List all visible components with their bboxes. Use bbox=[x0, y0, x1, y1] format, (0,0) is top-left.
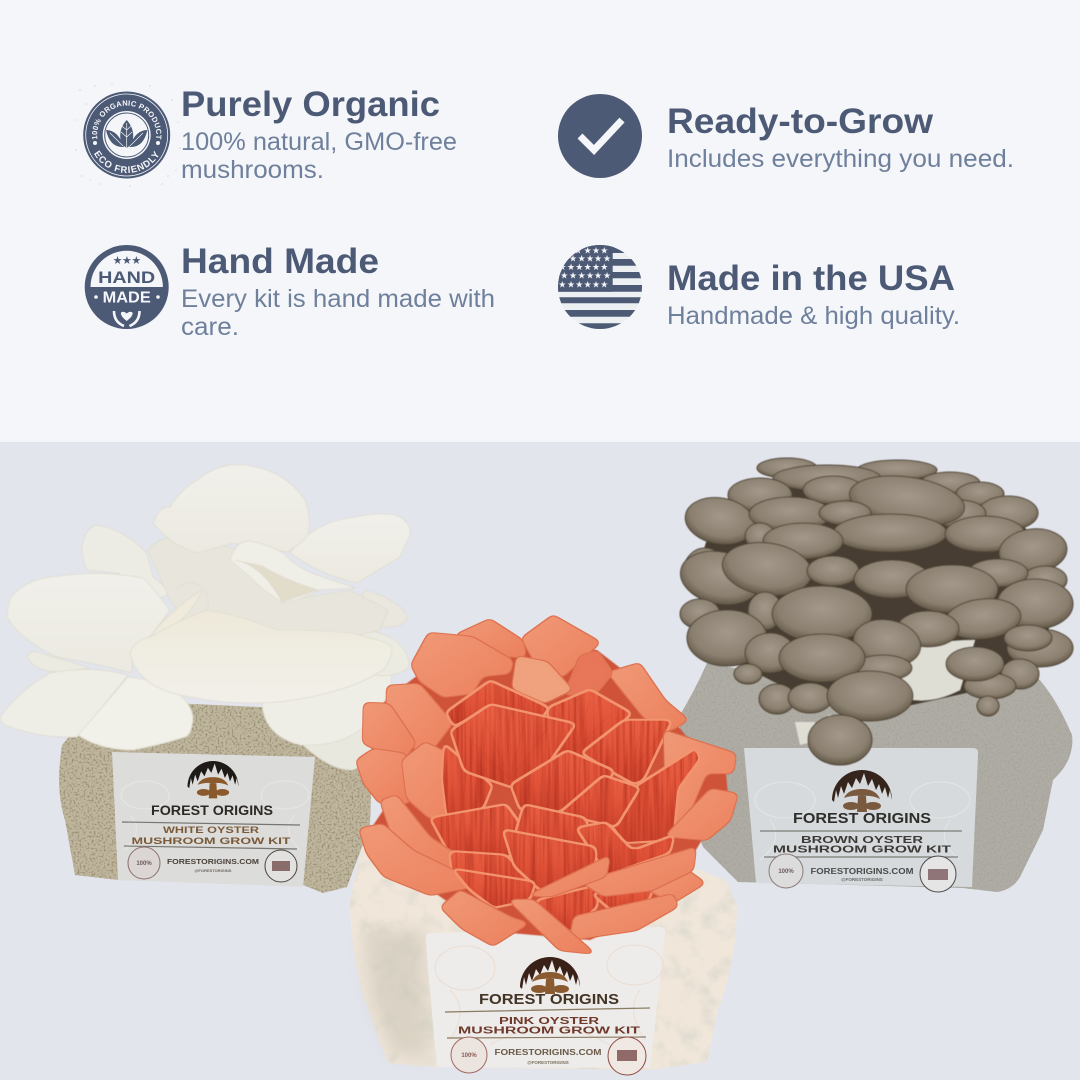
product label: white oyster: FOREST ORIGINS bbox=[151, 803, 273, 818]
icon: check mark bbox=[558, 94, 642, 178]
product label: brown oyster: 100% bbox=[778, 869, 794, 875]
description: purely organic: mushrooms. bbox=[181, 156, 324, 184]
product label: pink oyster: @FORESTORIGINS bbox=[527, 1060, 569, 1065]
icon: organic eco friendly seal: 100% ORGANIC PRODUCT bbox=[92, 100, 162, 140]
logo bbox=[520, 957, 580, 994]
icon: usa flag circle: ★★★★★ bbox=[569, 254, 611, 264]
heading: hand made: Hand Made bbox=[181, 242, 379, 281]
product label: white oyster: MUSHROOM GROW KIT bbox=[132, 836, 291, 847]
icon: hand made badge: MADE bbox=[103, 290, 151, 306]
description: hand made: Every kit is hand made with bbox=[181, 285, 495, 313]
description: hand made: care. bbox=[181, 313, 239, 341]
feature: made in the usa bbox=[556, 243, 960, 331]
icon: usa flag circle bbox=[556, 243, 644, 331]
product label: white oyster: @FORESTORIGINS bbox=[195, 868, 232, 873]
product label: brown oyster: FORESTORIGINS.COM bbox=[810, 867, 914, 876]
product label: pink oyster: PINK OYSTER bbox=[499, 1015, 600, 1027]
heading: ready-to-grow: Ready-to-Grow bbox=[667, 102, 934, 141]
feature: hand made bbox=[85, 242, 495, 341]
product: white oyster grow kit bbox=[0, 465, 410, 893]
icon: usa flag circle: ★★★★★★ bbox=[560, 270, 611, 280]
grow bag: pink bbox=[350, 835, 737, 1070]
grow bag: white bbox=[59, 700, 372, 893]
product label: brown oyster: @FORESTORIGINS bbox=[841, 877, 883, 882]
product label: brown oyster: BROWN OYSTER bbox=[801, 834, 924, 846]
product label: white oyster: 100% bbox=[136, 861, 152, 867]
icon: usa flag circle: ★★★★ bbox=[574, 246, 608, 256]
product label: pink oyster bbox=[426, 927, 665, 1075]
icon: usa flag circle: ★★★★★★ bbox=[558, 262, 608, 272]
logo bbox=[188, 761, 238, 798]
product label: white oyster: WHITE OYSTER bbox=[163, 825, 259, 836]
product label: pink oyster: FOREST ORIGINS bbox=[479, 991, 619, 1008]
product label: pink oyster: FORESTORIGINS.COM bbox=[494, 1048, 602, 1057]
product label: white oyster bbox=[112, 752, 315, 887]
bottom background bbox=[0, 442, 1080, 1080]
product: pink oyster grow kit bbox=[350, 614, 739, 1075]
mushroom cluster: brown oyster bbox=[675, 458, 1073, 765]
product label: pink oyster: 100% bbox=[461, 1053, 477, 1059]
product label: pink oyster: MUSHROOM GROW KIT bbox=[458, 1024, 641, 1036]
mushroom cluster: pink oyster bbox=[355, 614, 739, 955]
top background bbox=[0, 0, 1080, 442]
product label: brown oyster: MUSHROOM GROW KIT bbox=[773, 844, 952, 856]
product label: white oyster: FORESTORIGINS.COM bbox=[167, 857, 259, 866]
icon: hand made badge: HAND bbox=[98, 268, 155, 287]
heading: purely organic: Purely Organic bbox=[181, 85, 440, 124]
mushroom cluster: white oyster bbox=[0, 465, 410, 770]
bag shading: left side bbox=[362, 930, 430, 1058]
product label: brown oyster bbox=[744, 748, 978, 892]
description: purely organic: 100% natural, GMO-free bbox=[181, 128, 457, 156]
icon: organic eco friendly seal: ECO FRIENDLY bbox=[94, 150, 158, 174]
icon: organic eco friendly seal bbox=[74, 84, 180, 186]
product: brown oyster grow kit bbox=[675, 458, 1073, 892]
icon: hand made badge: ★★★ bbox=[113, 254, 141, 267]
feature: purely organic bbox=[74, 84, 457, 186]
description: made in the usa: Handmade & high quality. bbox=[667, 302, 960, 330]
feature: ready-to-grow bbox=[558, 94, 1014, 178]
grow bag: brown bbox=[680, 663, 1072, 892]
icon: usa flag circle: ★★★★★★ bbox=[558, 280, 608, 290]
icon: hand made badge bbox=[85, 245, 169, 329]
description: ready-to-grow: Includes everything you need. bbox=[667, 145, 1014, 173]
heading: made in the usa: Made in the USA bbox=[667, 259, 955, 298]
logo bbox=[832, 770, 892, 812]
product label: brown oyster: FOREST ORIGINS bbox=[793, 810, 931, 827]
